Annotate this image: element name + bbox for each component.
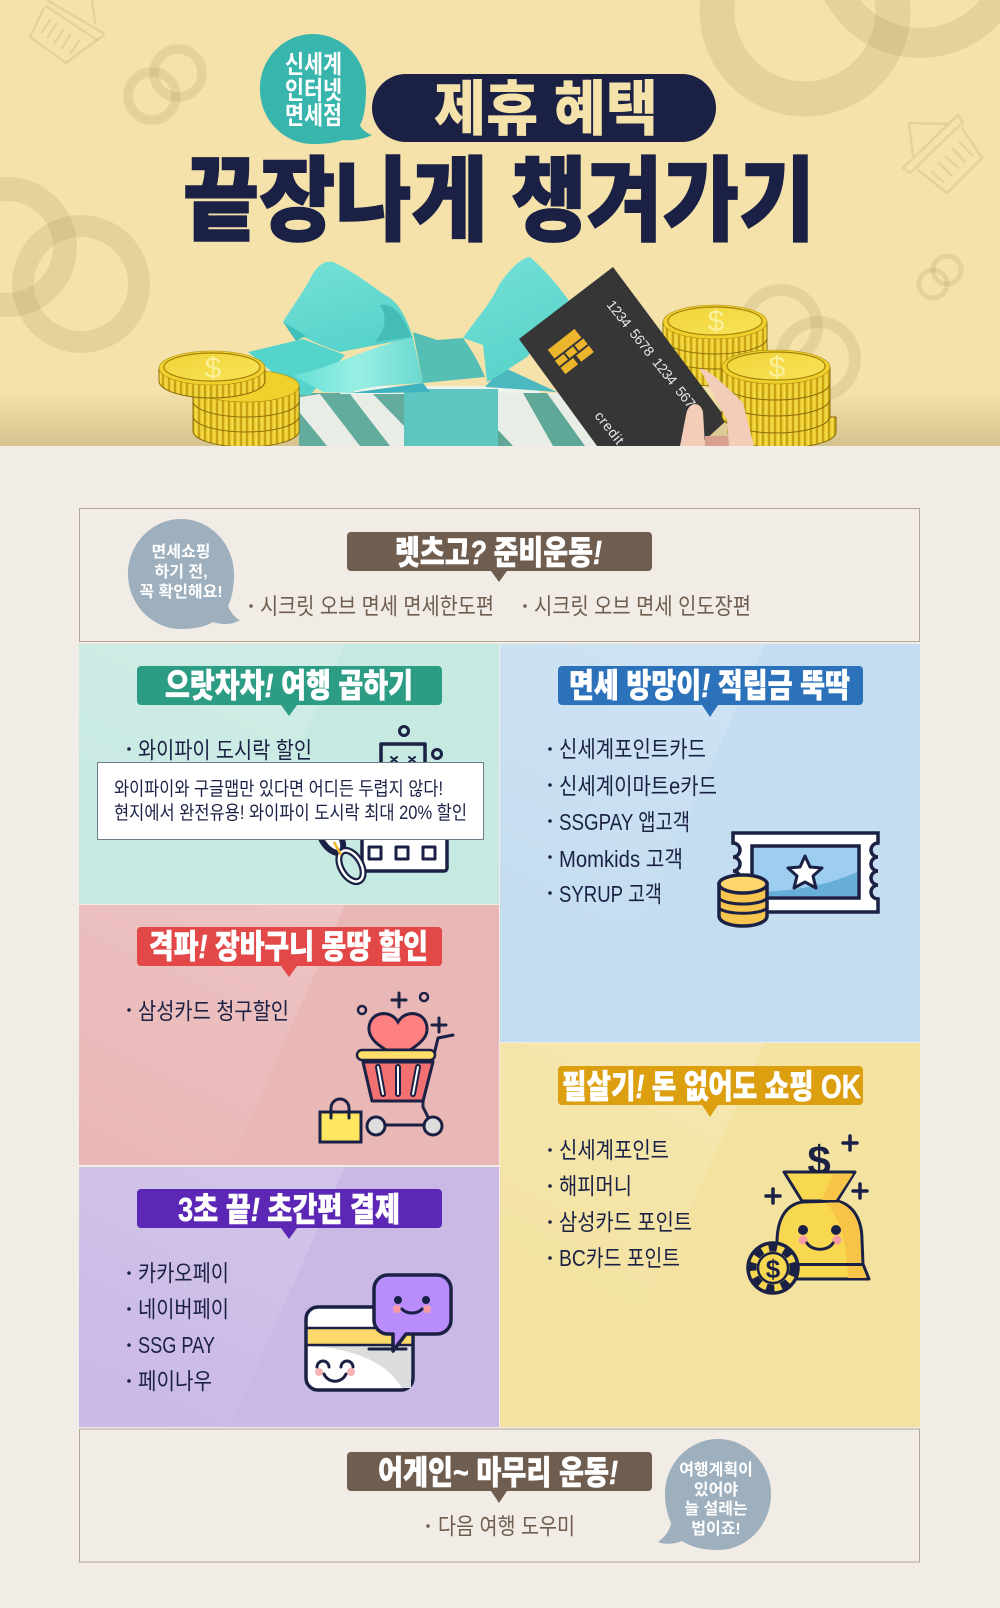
heading tag: basket: 격파! 장바구니 몽땅 할인 [149, 928, 428, 965]
list: point cards: Momkids 고객 [559, 846, 683, 872]
title pill [372, 74, 716, 143]
list: payments: SSG PAY [138, 1332, 215, 1358]
heading tag: 3 seconds pay: 3초 끝! 초간편 결제 [178, 1191, 400, 1228]
list: secret of duty free: 시크릿 오브 면세 면세한도편 [260, 593, 494, 619]
title pill: 제휴 혜택 [434, 76, 658, 143]
list: point cards: SSGPAY 앱고객 [559, 809, 690, 835]
list: point cards: 신세계포인트카드 [559, 736, 706, 762]
list: samsung card: 삼성카드 청구할인 [138, 998, 289, 1024]
back coin stack right: $ [708, 305, 725, 338]
main title: 끝장나게 챙겨가기 [183, 151, 815, 253]
gift box [299, 386, 597, 446]
list: points [548, 1137, 692, 1271]
heading tag: travel [137, 666, 442, 716]
credit card: credit c [592, 408, 635, 457]
icon: money bag [748, 1136, 869, 1293]
icon: wifi device with chain [314, 726, 447, 886]
heading tag: points [558, 666, 863, 717]
list: point cards: SYRUP 고객 [559, 881, 662, 907]
hero banner [0, 0, 1000, 457]
credit card [519, 267, 727, 457]
left coin stack: $ [205, 352, 222, 385]
speech bubble: check before shopping: 하기 전, [154, 563, 208, 581]
heading tag: no money: 필살기! 돈 없어도 쇼핑 OK [562, 1068, 861, 1105]
list: payments: 카카오페이 [138, 1260, 229, 1286]
speech bubble: travel plans: 법이죠! [691, 1520, 741, 1538]
badge: shinsegae internet duty free [260, 34, 372, 144]
panel: wrap-up box [80, 1429, 920, 1562]
heading tag: let's go warm-up [347, 532, 652, 582]
list: travel helper: 다음 여행 도우미 [438, 1513, 575, 1539]
credit card: 1234 5678 1234 567 [604, 297, 699, 411]
speech bubble: travel plans: 있어야 [694, 1481, 738, 1499]
list: point cards [548, 736, 717, 907]
panel: points shopping (yellow) [500, 1043, 920, 1427]
tooltip: wifi description: 현지에서 완전유용! 와이파이 도시락 최대 20% 할인 [114, 802, 467, 824]
panel: basket discount (red) [79, 905, 499, 1165]
hand [680, 369, 754, 446]
panel: points card (blue) [500, 644, 920, 1042]
heading tag: no money [558, 1066, 863, 1117]
front coin stack right: $ [769, 351, 786, 384]
heading tag: again wrap-up: 어게인~ 마무리 운동! [378, 1454, 618, 1491]
list: points: 삼성카드 포인트 [559, 1209, 692, 1235]
list: points: 신세계포인트 [559, 1137, 669, 1163]
speech bubble: check before shopping: 면세쇼핑 [152, 543, 210, 561]
panel: pre-shopping box [80, 508, 920, 642]
tooltip: wifi description [98, 762, 484, 840]
heading tag: let's go warm-up: 렛츠고? 준비운동! [395, 534, 602, 571]
panel: easy pay (purple) [79, 1167, 499, 1427]
left coin stack [159, 351, 299, 447]
gift bow [248, 257, 570, 395]
badge: shinsegae internet duty free: 신세계 [285, 51, 342, 79]
panel: travel (green) [79, 644, 499, 904]
tooltip: wifi description: 와이파이와 구글맵만 있다면 어디든 두렵지 않다! [114, 778, 443, 800]
speech bubble: check before shopping: 꼭 확인해요! [139, 583, 223, 601]
badge: shinsegae internet duty free: 인터넷 [285, 77, 342, 105]
speech bubble: check before shopping [128, 519, 240, 629]
icon: ticket and coins [719, 833, 878, 926]
front coin stack right [722, 350, 836, 448]
list: payments: 페이나우 [138, 1368, 212, 1394]
heading tag: again wrap-up [347, 1452, 652, 1503]
speech bubble: travel plans: 여행계획이 [679, 1460, 753, 1479]
list: secret of duty free [249, 593, 751, 619]
badge: shinsegae internet duty free: 면세점 [285, 102, 342, 130]
heading tag: basket [137, 927, 442, 977]
list: points: BC카드 포인트 [559, 1245, 680, 1271]
back coin stack right [663, 305, 767, 386]
icon: shopping cart with heart [320, 993, 453, 1142]
heading tag: 3 seconds pay [137, 1189, 442, 1239]
icon: money bag: $ [807, 1137, 831, 1184]
speech bubble: travel plans [658, 1439, 771, 1550]
list: points: 해피머니 [559, 1173, 632, 1199]
icon: card with chat bubble [306, 1275, 451, 1390]
speech bubble: travel plans: 늘 설레는 [684, 1500, 748, 1518]
list: payments [127, 1260, 229, 1394]
list: secret of duty free: 시크릿 오브 면세 인도장편 [534, 593, 751, 619]
list: payments: 네이버페이 [138, 1296, 229, 1322]
list: wifi: 와이파이 도시락 할인 [138, 737, 312, 763]
heading tag: points: 면세 방망이! 적립금 뚝딱 [569, 667, 850, 704]
icon: money bag: $ [766, 1254, 781, 1284]
list: point cards: 신세계이마트e카드 [559, 773, 717, 799]
heading tag: travel: 으랏차차! 여행 곱하기 [165, 667, 413, 704]
